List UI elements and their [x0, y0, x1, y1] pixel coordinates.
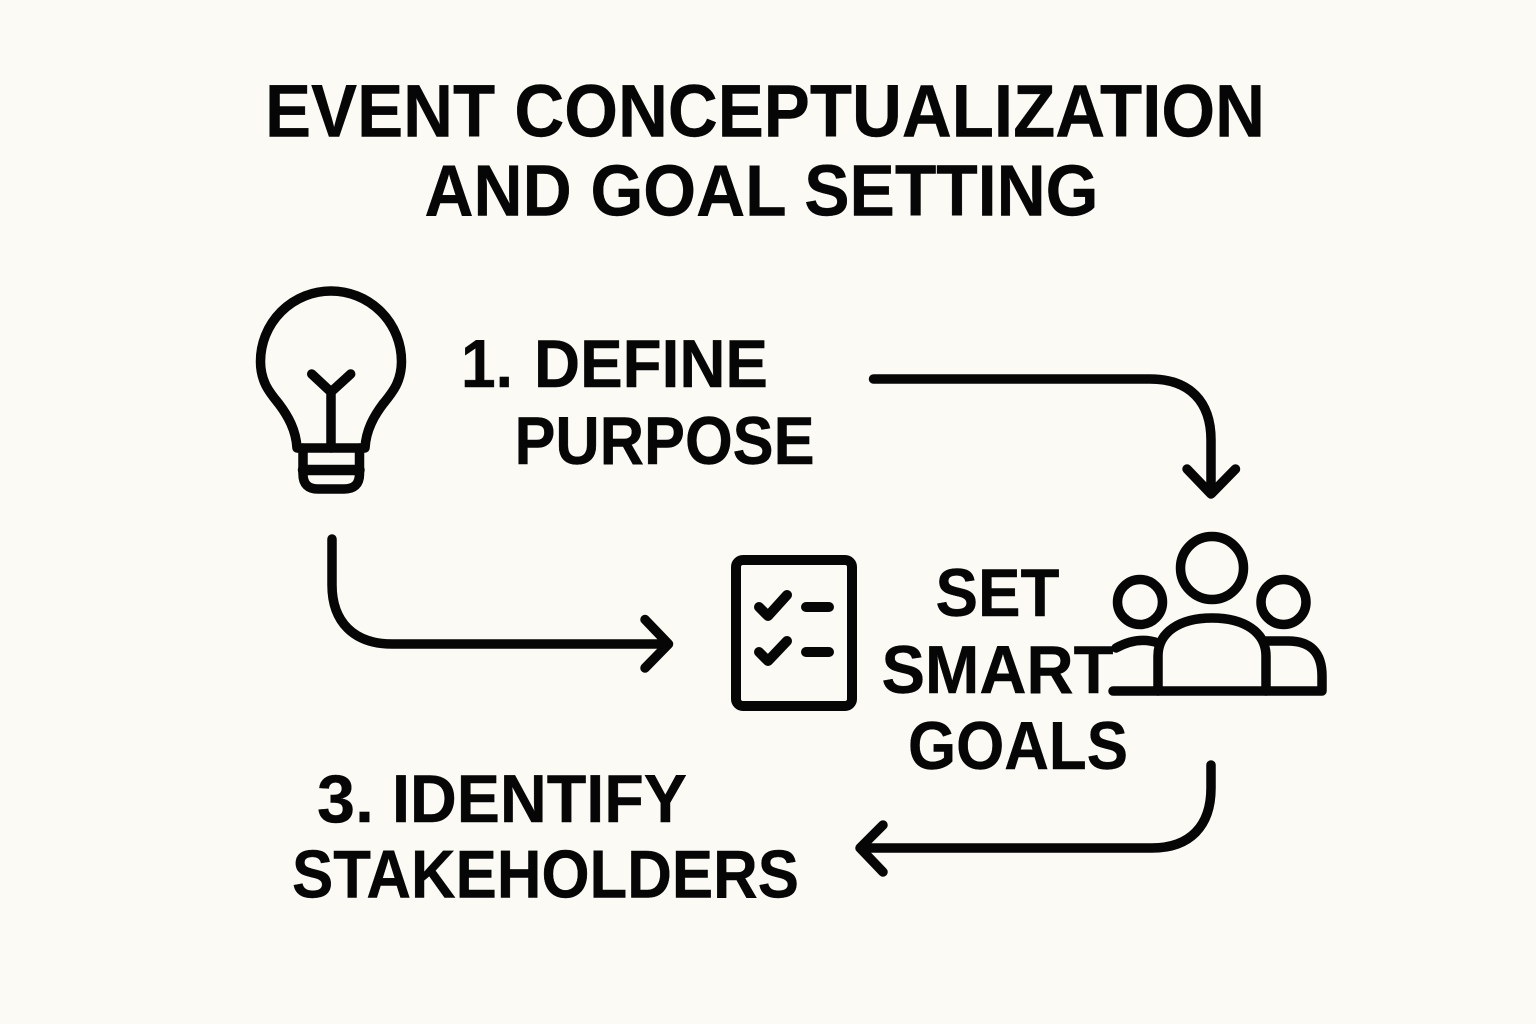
step 3 label: IDENTIFY: [392, 761, 687, 837]
step 1 label: [461, 326, 814, 479]
step 2 label: SET: [936, 555, 1060, 631]
title: AND GOAL SETTING: [424, 152, 1098, 232]
step 2 label: SMART: [882, 632, 1114, 708]
step 1 label: DEFINE: [534, 326, 768, 402]
arrow: people to stakeholders label: [860, 765, 1211, 872]
step 3 label: [292, 761, 799, 912]
arrow: purpose to stakeholders icon: [874, 379, 1236, 494]
arrow: bulb to checklist: [332, 539, 668, 668]
title: EVENT CONCEPTUALIZATION: [265, 70, 1265, 152]
icon: checklist: [736, 560, 852, 706]
title: [265, 70, 1265, 232]
step 1 label: PURPOSE: [514, 403, 814, 479]
step 1 label: 1.: [461, 326, 513, 402]
step 3 label: 3.: [317, 761, 374, 837]
icon: group of people: [1113, 536, 1322, 691]
icon: light bulb: [260, 291, 402, 489]
step 2 label: GOALS: [908, 708, 1128, 784]
step 3 label: STAKEHOLDERS: [292, 836, 799, 912]
step 2 label: [882, 555, 1128, 784]
